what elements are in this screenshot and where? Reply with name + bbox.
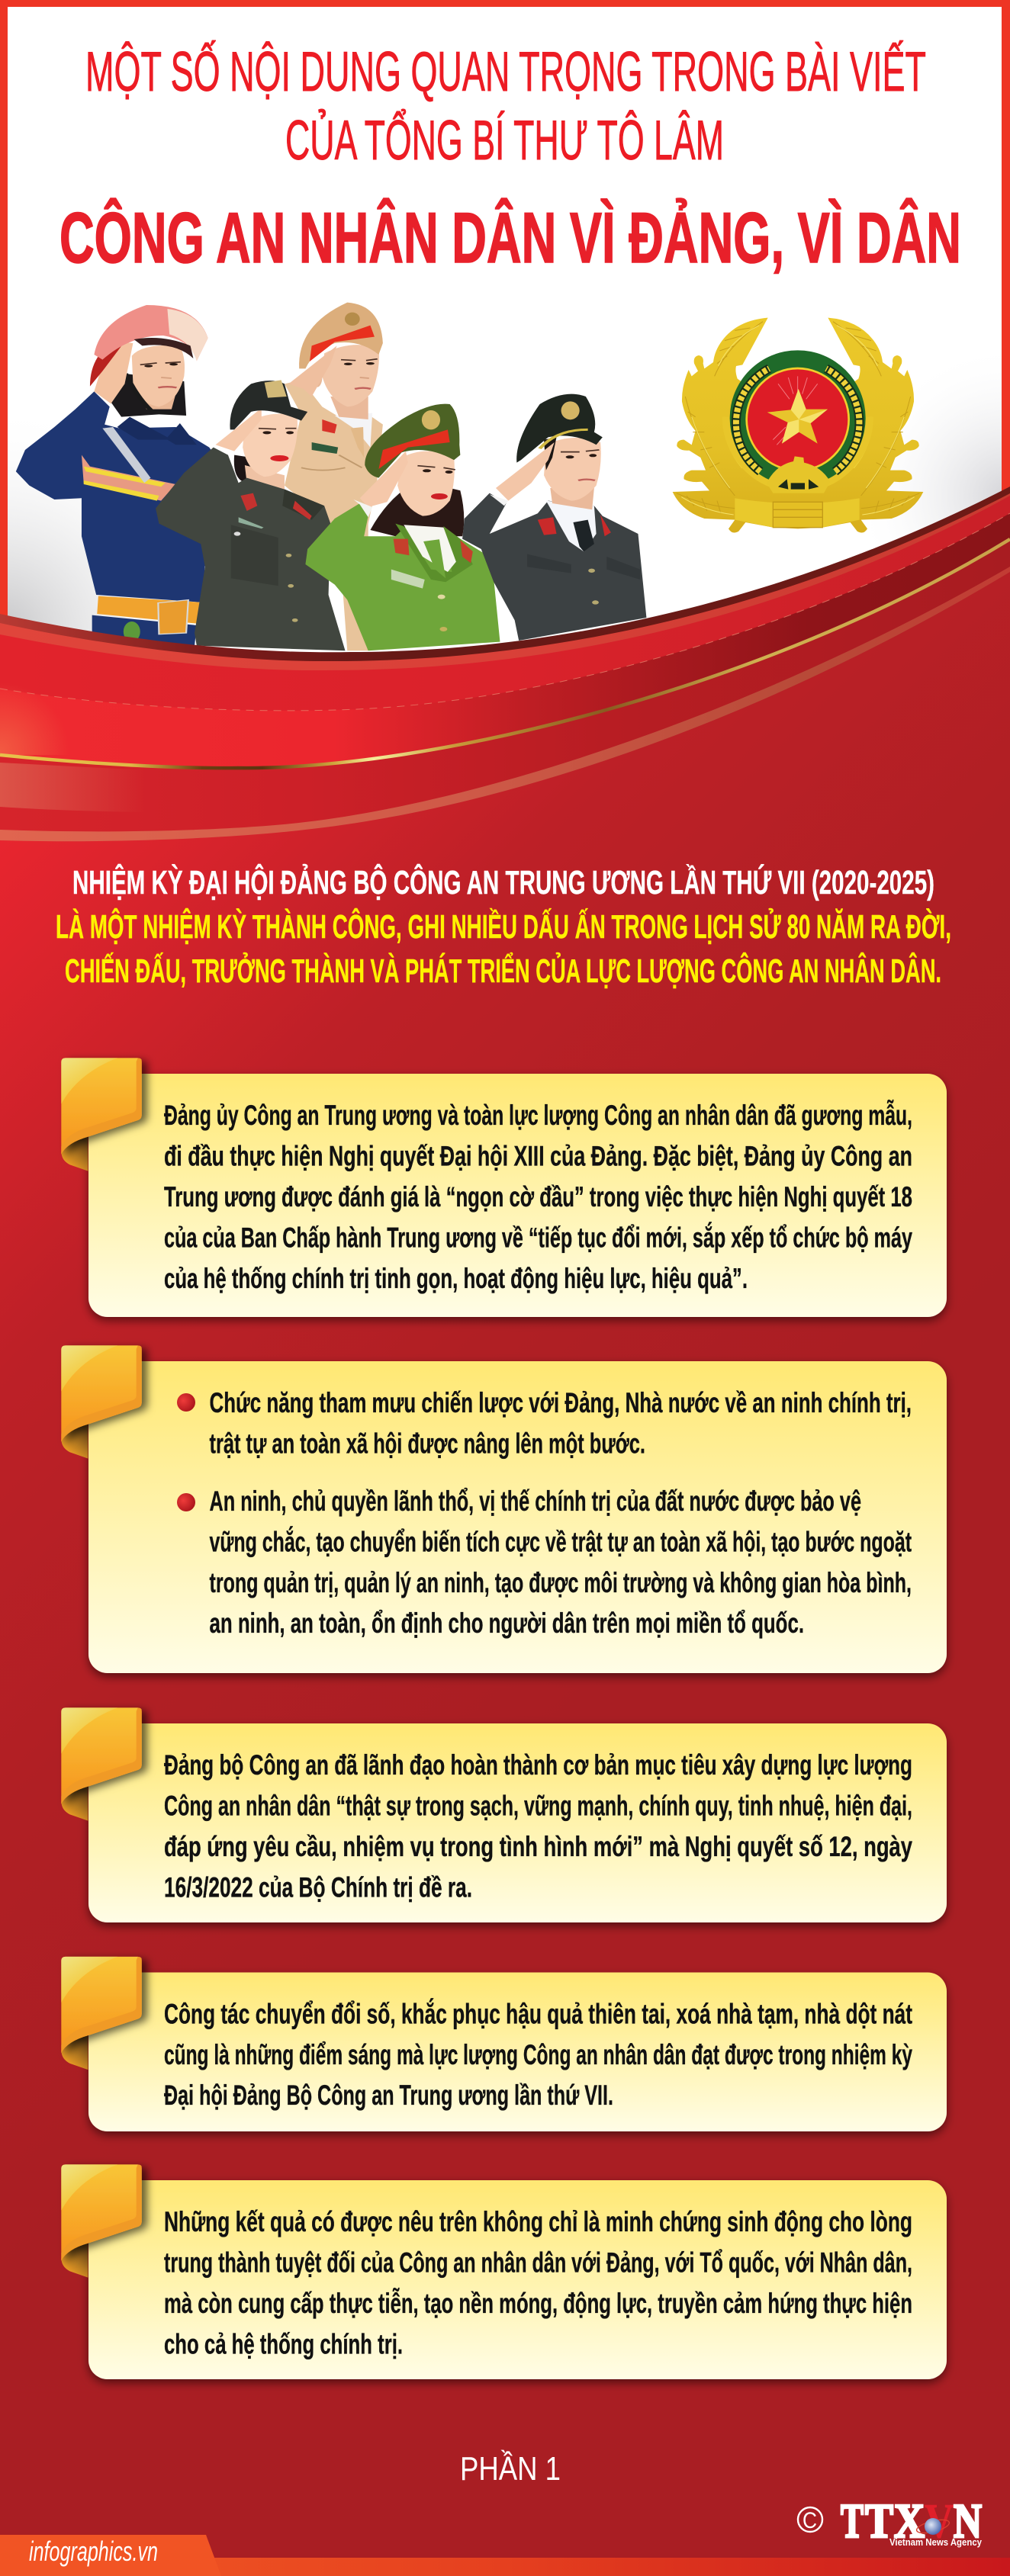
panel: card 2 (61, 1345, 947, 1673)
logo: TTXVN: V (925, 2494, 954, 2548)
panel: card 1: của hệ thống chính trị tinh gọn, hoạt động hiệu lực, hiệu quả”. (164, 1263, 748, 1294)
officer: dark uniform woman (156, 380, 346, 650)
title: first heading lines (85, 40, 926, 172)
copyright mark (798, 2507, 822, 2533)
officer: green uniform woman (305, 404, 500, 650)
officer: traffic police (285, 303, 383, 650)
panel: card 5 (61, 2164, 947, 2379)
logo: TTXVN: X (894, 2494, 925, 2548)
illustration: five saluting officers (16, 303, 646, 650)
panel: card 3: 16/3/2022 của Bộ Chính trị đề ra. (164, 1871, 472, 1903)
panel: card 3 (61, 1707, 947, 1922)
footer bar (0, 2535, 1010, 2576)
emblem: People's Public Security badge (673, 318, 923, 533)
panel: card 4 (61, 1957, 947, 2131)
main red background panel (0, 567, 1010, 2576)
logo: TTXVN: Vietnam News Agency (889, 2536, 983, 2548)
officer: dark uniform man (462, 394, 646, 641)
copyright mark: C (803, 2508, 817, 2533)
header panel: white background with red frame (0, 0, 1010, 686)
panel: card 5: cho cả hệ thống chính trị. (164, 2329, 403, 2359)
decorative red swoosh banner (0, 487, 1010, 915)
logo: TTXVN: N (954, 2494, 982, 2548)
officer: firefighter (16, 305, 236, 646)
panel: card 2: trật tự an toàn xã hội được nâng lên một bước. (209, 1428, 645, 1460)
logo: TTXVN: T (865, 2494, 893, 2548)
intro heading (56, 862, 951, 990)
logo: TTXVN: T (841, 2494, 864, 2548)
footer bar: infographics.vn (29, 2536, 158, 2567)
panel: card 4: Đại hội Đảng Bộ Công an Trung ương lần thứ VII. (164, 2080, 613, 2111)
title: first heading lines: CỦA TỔNG BÍ THƯ TÔ LÂM (285, 110, 724, 172)
part label: PHẦN 1 (460, 2449, 561, 2488)
logo: TTXVN (841, 2494, 983, 2548)
panel: card 1 (61, 1058, 947, 1317)
